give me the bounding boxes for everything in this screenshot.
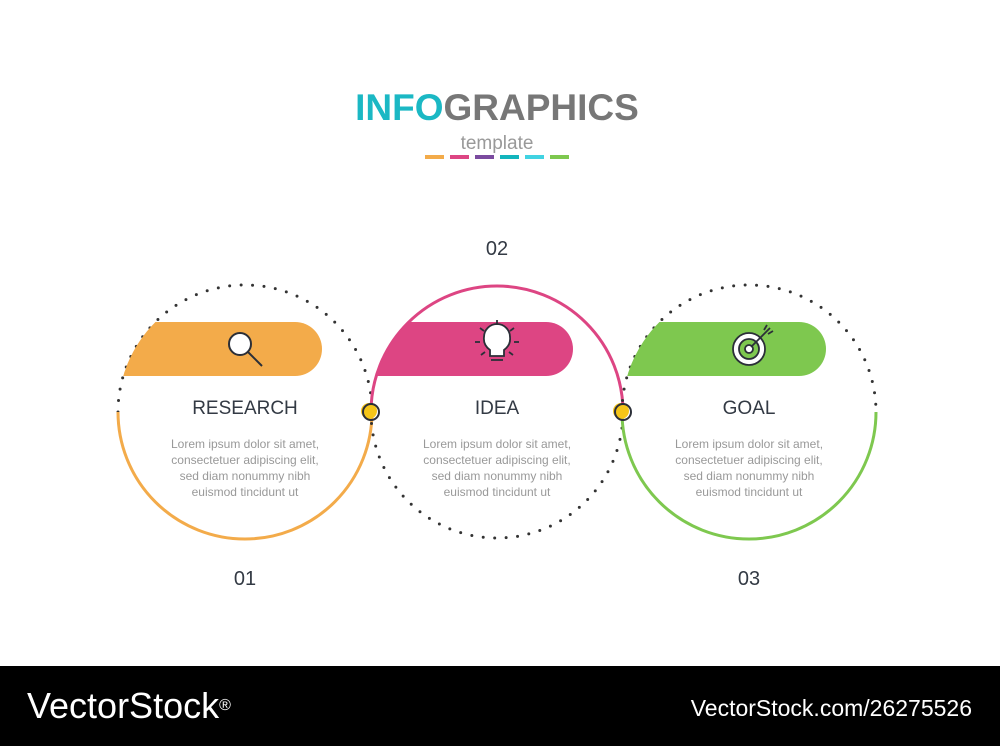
number 03: 03 (738, 568, 760, 590)
heading: research: RESEARCH (192, 398, 298, 419)
heading: goal: GOAL (723, 398, 775, 419)
connector dot 2 (613, 403, 631, 420)
text: idea: sed diam nonummy nibh (432, 469, 562, 483)
step 01 research (100, 285, 372, 590)
text: idea: euismod tincidunt ut (444, 485, 551, 499)
icon: magnifier (229, 333, 262, 366)
step 03 goal (600, 285, 876, 590)
number 01: 01 (234, 568, 256, 590)
text: research: Lorem ipsum dolor sit amet, (171, 437, 319, 451)
text: research: sed diam nonummy nibh (180, 469, 310, 483)
text: research: consectetuer adipiscing elit, (171, 453, 319, 467)
banner: research (123, 322, 322, 376)
heading: idea: IDEA (475, 398, 519, 419)
color legend bars (425, 155, 569, 159)
text: goal: euismod tincidunt ut (696, 485, 803, 499)
text: idea: Lorem ipsum dolor sit amet, (423, 437, 571, 451)
text: goal: consectetuer adipiscing elit, (675, 453, 823, 467)
text: research: euismod tincidunt ut (192, 485, 299, 499)
banner: goal (627, 322, 826, 376)
step 02 idea (350, 238, 623, 538)
banner: idea (378, 322, 573, 376)
icon: target (733, 325, 773, 365)
icon: light bulb (475, 320, 519, 360)
footer bar (0, 666, 1000, 746)
text: idea: consectetuer adipiscing elit, (423, 453, 571, 467)
connector dot 1 (361, 403, 379, 420)
footer bar: VectorStock® (27, 685, 231, 726)
subtitle: template (461, 133, 533, 154)
footer bar: VectorStock.com/26275526 (691, 695, 972, 721)
title: INFOGRAPHICS (355, 87, 639, 128)
text: goal: sed diam nonummy nibh (684, 469, 814, 483)
text: goal: Lorem ipsum dolor sit amet, (675, 437, 823, 451)
number 02: 02 (486, 238, 508, 260)
